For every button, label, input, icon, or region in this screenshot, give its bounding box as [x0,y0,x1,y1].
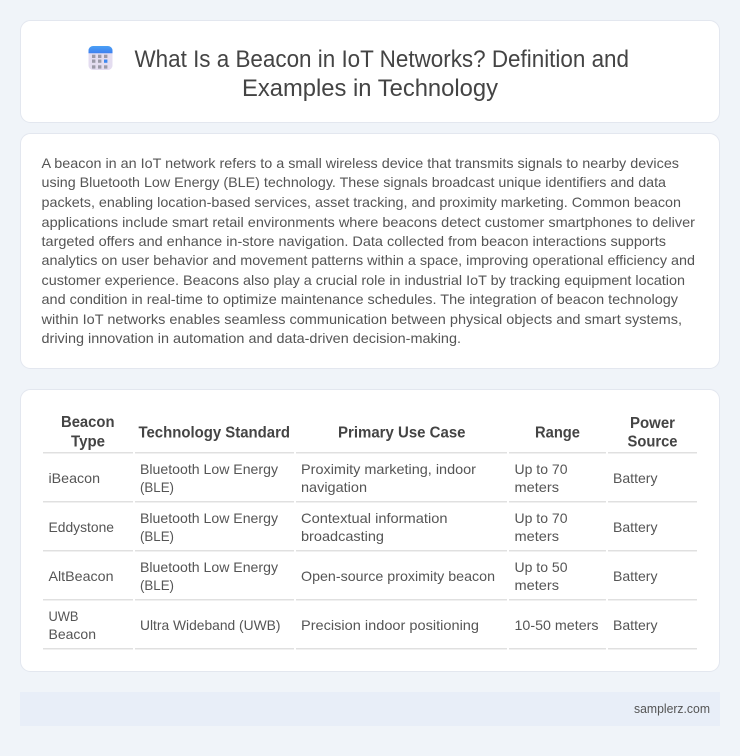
description text: applications include smart retail environments where beacons detect customer smartphones to deliver [42,214,695,230]
table header [61,414,678,450]
table row: AltBeacon: Open-source proximity beacon [301,568,495,584]
table row: Eddystone [48,510,658,544]
table row: UWB Beacon: Ultra Wideband (UWB) [140,617,280,633]
table header: Beacon [61,414,114,431]
table row: iBeacon [48,461,658,495]
table header: Range [535,424,580,442]
description text: driving innovation in automation and data-driven decision-making. [42,330,461,346]
table row: AltBeacon: Up to 50 [514,559,568,575]
table row: iBeacon: (BLE) [140,479,174,495]
table header: Primary Use Case [338,424,466,442]
table row: AltBeacon [48,559,658,593]
table row: iBeacon: Proximity marketing, indoor [301,461,476,477]
table row: AltBeacon: Battery [613,568,658,584]
description text: packets, enabling location-based services, asset tracking, and proximity marketing. Common beacon [42,194,681,210]
title: Examples in Technology [242,75,498,102]
description text: A beacon in an IoT network refers to a small wireless device that transmits signals to nearby devices [42,155,679,171]
description text: using Bluetooth Low Energy (BLE) technology. These signals broadcast unique identifiers and data [42,174,666,190]
description text: customer experience. Beacons also play a crucial role in industrial IoT by tracking equipment location [42,272,685,288]
description text: within IoT networks enables seamless communication between physical objects and smart systems, [40,311,682,327]
table row: UWB Beacon: Beacon [48,626,96,642]
table row: iBeacon: iBeacon [48,470,100,486]
table row: Eddystone: Contextual information [301,510,448,526]
table row: UWB Beacon [48,608,658,642]
table row: AltBeacon: meters [514,577,559,593]
table header: Power [630,415,675,432]
footer bar [20,692,720,726]
table row: Eddystone: Bluetooth Low Energy [140,510,278,526]
table row: iBeacon: Up to 70 [514,461,568,477]
table row: AltBeacon: Bluetooth Low Energy [140,559,278,575]
table row: Eddystone: meters [514,528,559,544]
panel: description [20,134,720,368]
table row: Eddystone: Up to 70 [514,510,568,526]
description text: analytics on user behavior and movement patterns within a space, improving operational efficiency and [42,252,695,268]
title: What Is a Beacon in IoT Networks? Definition and [134,46,629,73]
table row: UWB Beacon: Battery [613,617,658,633]
table row: UWB Beacon: Precision indoor positioning [301,617,479,633]
table row: Eddystone: broadcasting [301,528,384,544]
description text: targeted offers and enhance in-store navigation. Data collected from beacon interactions supports [42,233,666,249]
title [134,46,629,102]
table header: Source [628,434,678,450]
description text [40,155,695,346]
table row: Eddystone: (BLE) [140,528,174,544]
table row: UWB Beacon: UWB [48,608,78,624]
table row: iBeacon: Battery [613,470,658,486]
description text: and condition in real-time to optimize maintenance schedules. The integration of beacon technology [42,291,678,307]
panel: beacon comparison table [20,390,720,672]
icon: calendar [88,46,112,70]
panel: title header [20,20,720,122]
table header: Type [71,434,105,450]
footer credit: samplerz.com [634,701,710,716]
table row: UWB Beacon: 10-50 meters [514,617,598,633]
table row: AltBeacon: (BLE) [140,577,174,593]
table row: Eddystone: Battery [613,519,658,535]
table row: iBeacon: meters [514,479,559,495]
table row: AltBeacon: AltBeacon [48,568,114,584]
table row: Eddystone: Eddystone [48,519,114,535]
table row: iBeacon: navigation [301,479,367,495]
table header: Technology Standard [138,424,290,442]
table row: iBeacon: Bluetooth Low Energy [140,461,278,477]
